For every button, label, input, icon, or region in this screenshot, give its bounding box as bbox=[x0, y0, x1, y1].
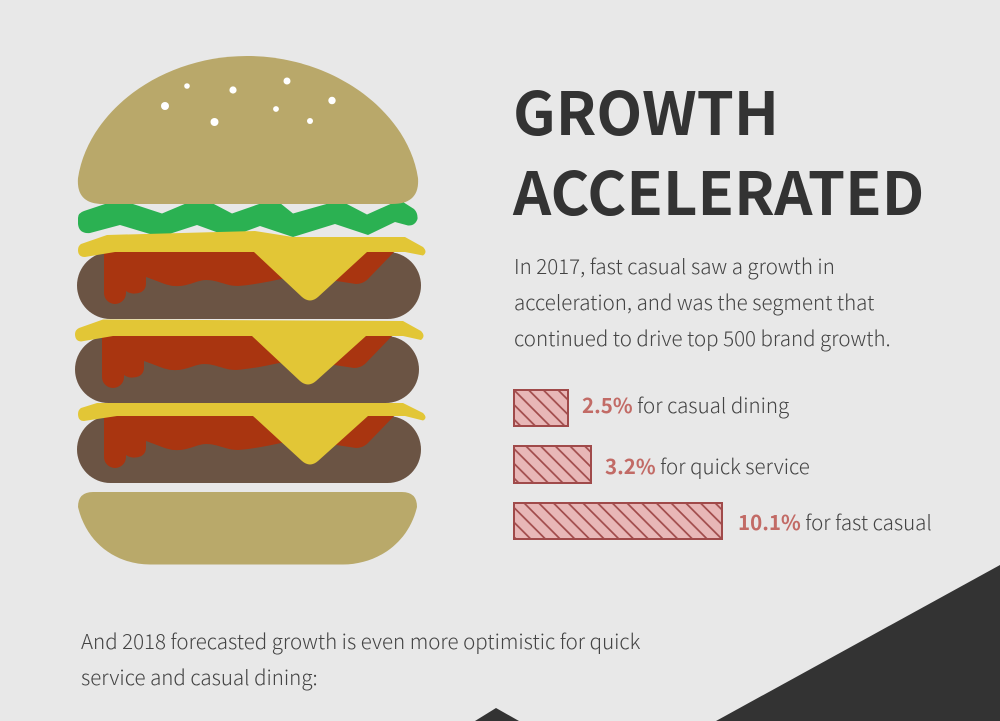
bar: fast casual bbox=[514, 503, 722, 539]
intro text bbox=[514, 250, 891, 352]
forecast text: And 2018 forecasted growth is even more optimistic for quick bbox=[81, 625, 641, 655]
ketchup 2 bbox=[102, 336, 392, 388]
ketchup 3 bbox=[104, 416, 394, 468]
title bbox=[512, 67, 924, 233]
label: fast casual: 10.1% for fast casual bbox=[738, 506, 932, 536]
label: quick service: 3.2% for quick service bbox=[605, 450, 810, 480]
patty 2 bbox=[75, 336, 419, 403]
bar: casual dining bbox=[514, 390, 568, 426]
title: GROWTH bbox=[513, 67, 779, 153]
cheese 2 bbox=[75, 320, 424, 384]
sesame seeds bbox=[161, 78, 336, 126]
label: casual dining: 2.5% for casual dining bbox=[582, 389, 789, 419]
intro text: continued to drive top 500 brand growth. bbox=[514, 322, 891, 352]
forecast text bbox=[81, 625, 641, 691]
cheese 3 bbox=[78, 403, 426, 464]
top bun bbox=[78, 56, 418, 204]
cheese 1 bbox=[78, 231, 426, 300]
bottom bun bbox=[78, 492, 417, 564]
patty 1 bbox=[77, 252, 421, 319]
intro text: In 2017, fast casual saw a growth in bbox=[514, 250, 835, 280]
icon: burger bbox=[75, 56, 426, 564]
forecast text: service and casual dining: bbox=[81, 661, 318, 691]
intro text: acceleration, and was the segment that bbox=[514, 286, 874, 316]
title: ACCELERATED bbox=[512, 147, 924, 233]
lettuce bbox=[78, 202, 418, 237]
patty 3 bbox=[77, 416, 421, 483]
ketchup 1 bbox=[104, 252, 394, 304]
bar: quick service bbox=[514, 446, 591, 483]
dark corner triangle bbox=[716, 565, 1000, 721]
small dark triangle bbox=[475, 708, 519, 721]
